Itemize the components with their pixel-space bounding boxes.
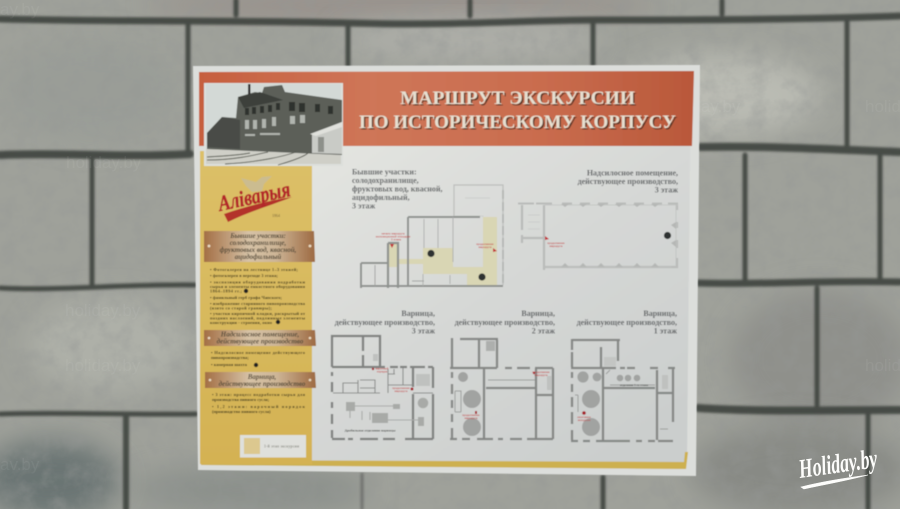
watermarks: holiday.by <box>665 97 741 116</box>
white content panel <box>312 146 690 462</box>
red callout: 3 этажа <box>391 238 401 242</box>
room label: отделение 1-го этажа <box>620 383 649 387</box>
banner: former sections: ацидофильный <box>235 253 281 261</box>
list: silo room <box>211 350 306 367</box>
board background <box>193 65 700 476</box>
list: former sections: сырья и элементы емкостного оборудования <box>210 284 306 289</box>
red callout: продолжение <box>476 242 494 246</box>
list: former sections: • фотогалерея в переходе 3 этажа; <box>210 273 279 278</box>
bottom yellow strip <box>201 452 688 469</box>
red callouts: порядок <box>377 370 388 374</box>
red callout: экспозиционной площадки <box>376 234 411 238</box>
plan: brewhouse, 2nd floor <box>450 309 555 439</box>
eye marker <box>664 232 671 239</box>
banner: former sections: солодохранилище, <box>230 239 287 247</box>
list: silo room: • Надсилосное помещение действующего <box>211 350 306 355</box>
title: ПО ИСТОРИЧЕСКОМУ КОРПУСУ <box>359 112 676 133</box>
red callout <box>577 411 591 422</box>
yellow sidebar <box>200 151 316 464</box>
red callout: маршрута <box>549 244 563 248</box>
title <box>359 88 678 134</box>
list: brewhouse: производства пивного сусла; <box>212 397 270 402</box>
list: former sections: • фамильный герб графа Чапского; <box>210 295 283 300</box>
tanks <box>458 372 481 436</box>
banner: silo room: действующее производство <box>217 338 304 346</box>
red callout: окончание <box>577 415 591 419</box>
watermarks: ay.by <box>0 0 40 19</box>
archive photo of the building <box>204 83 343 166</box>
banner: brewhouse: Варница, <box>247 373 277 381</box>
plan heading: действующее производство, <box>577 318 677 327</box>
list: brewhouse: • 3 этаж: процесс подработки сырья для <box>212 392 306 397</box>
brewery logo <box>214 176 292 222</box>
list: silo room: пивопроизводства; <box>211 355 249 360</box>
banner: former sections: фруктовых вод, квасной, <box>220 246 297 254</box>
list: former sections <box>210 267 306 325</box>
banner: brewhouse <box>205 372 316 388</box>
list: brewhouse: (производство пивного сусла) <box>212 409 271 414</box>
watermarks: holiday.by <box>65 356 141 375</box>
brewery logo: 1864 <box>272 213 280 218</box>
red callout: маршрута <box>478 245 492 249</box>
banner: former sections: Бывшие участки: <box>229 232 286 240</box>
watermarks: holiday.by <box>66 153 142 172</box>
plan heading: действующее производство, <box>455 318 555 327</box>
list: former sections: • Фотогалерея на лестнице 1–3 этажей; <box>210 267 299 272</box>
plan heading <box>352 168 442 210</box>
title: МАРШРУТ ЭКСКУРСИИ <box>402 90 637 110</box>
banner: silo room: Надсилосное помещение, <box>220 330 299 338</box>
plan heading: 1 этаж <box>654 326 677 336</box>
red callouts <box>372 366 414 393</box>
banner: brewhouse: действующее производство <box>219 380 306 388</box>
plan heading: 3 этаж <box>412 326 435 336</box>
plan: former sections, 3rd floor <box>352 168 503 288</box>
list: brewhouse: • 1,2 этажи: варочный порядок <box>212 404 305 409</box>
highlighted route <box>389 217 497 285</box>
list: former sections: поздних наслоений, подлинные элементы <box>210 316 306 320</box>
red callout: продолжение <box>547 241 565 245</box>
red callouts <box>462 370 550 420</box>
tanks <box>577 371 640 436</box>
watermarks: holiday.by <box>65 301 141 320</box>
banner: former sections <box>204 231 315 262</box>
list: former sections: • экспозиция оборудования подработки <box>210 280 305 284</box>
list: former sections: конструкции - строения, окно <box>210 320 273 325</box>
title: МАРШРУТ ЭКСКУРСИИ <box>400 88 635 109</box>
list: silo room: • камерная шахта <box>211 362 248 367</box>
plan: brewhouse, 1st floor <box>571 309 677 441</box>
plan heading: 2 этаж <box>532 326 555 336</box>
title: ПО ИСТОРИЧЕСКОМУ КОРПУСУ <box>360 114 678 134</box>
list: former sections: (взято со старой гравюры); <box>210 306 273 310</box>
watermarks: av.by <box>0 455 40 474</box>
plan heading: Варница, <box>643 309 677 318</box>
red callouts: варочный <box>376 366 389 370</box>
red callout <box>545 236 565 248</box>
brewery logo: Аліварыя <box>214 176 292 216</box>
red callout: начало маршрута <box>381 232 405 236</box>
red callouts: маршрута <box>394 389 408 393</box>
red callouts: продолжение <box>532 370 550 374</box>
banner: silo room <box>204 330 316 346</box>
plan heading <box>335 309 435 336</box>
list: former sections: • изображение старинного пивопроизводства <box>210 301 306 306</box>
plan heading: Бывшие участки: <box>352 168 417 176</box>
eye marker <box>478 273 486 281</box>
plan heading: действующее производство, <box>335 318 435 327</box>
plan heading: солодохранилище, <box>352 176 419 185</box>
plan heading: 3 этаж <box>655 186 678 194</box>
plan heading: Варница, <box>521 309 555 318</box>
red callout <box>376 232 411 248</box>
plan: brewhouse, 3rd floor <box>332 309 435 439</box>
plan heading: 3 этаж <box>352 202 375 210</box>
red callouts: продолжение <box>462 413 480 417</box>
Holiday.by watermark logo <box>796 443 880 489</box>
plan: silo room, 3rd floor <box>518 168 678 270</box>
list: former sections: 1864–1894 гг.; <box>210 288 243 294</box>
red callouts: продолжение <box>392 386 410 390</box>
room label: Дробильное отделение варницы <box>345 428 396 432</box>
information board <box>193 65 700 476</box>
legend: 1-й этап экскурсии <box>264 444 299 448</box>
plan heading: действующее производство, <box>578 177 678 186</box>
red callout: экскурсии <box>578 418 591 422</box>
plan heading <box>578 168 678 194</box>
list: brewhouse <box>212 392 306 414</box>
plan heading <box>577 309 677 336</box>
plan heading: Надсилосное помещение, <box>587 168 678 178</box>
list: former sections: • участки кирпичной кладки, раскрытый от <box>210 311 306 316</box>
red callouts: маршрута <box>464 416 478 420</box>
plan heading: Варница, <box>401 309 435 318</box>
red callout <box>476 242 497 252</box>
plan heading <box>455 309 555 336</box>
plan heading: ацидофильный, <box>352 193 410 202</box>
eye marker <box>427 250 435 257</box>
header band <box>199 71 694 146</box>
plan heading: фруктовых вод, квасной, <box>352 184 442 194</box>
legend <box>240 435 306 458</box>
red callouts: маршрута <box>534 373 548 377</box>
